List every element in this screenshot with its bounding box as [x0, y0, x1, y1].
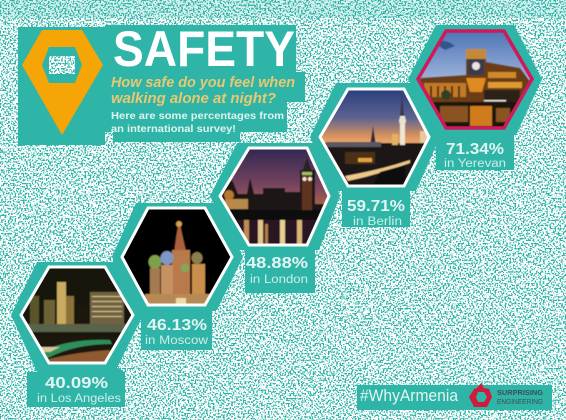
logo wordmark	[497, 388, 543, 406]
value: 71.34% in Yerevan: 71.34%	[446, 141, 504, 158]
value: 59.71% in Berlin	[347, 198, 405, 228]
value: 48.88% in London: in London	[250, 274, 308, 286]
subtitle question: How safe do you feel when	[111, 75, 295, 91]
intro text: Here are some percentages from	[111, 111, 284, 122]
panel: Los Angeles	[11, 262, 143, 407]
intro text	[111, 111, 284, 135]
panel: Berlin	[310, 83, 440, 228]
panel: London	[210, 143, 340, 293]
intro text: an international survey!	[111, 124, 236, 135]
teal backing	[112, 203, 243, 350]
logo wordmark: ENGINEERING	[497, 397, 543, 406]
photo: Yerevan Republic Square at night	[420, 32, 530, 126]
value: 40.09% in Los Angeles	[37, 375, 121, 405]
value: 46.13% in Moscow: in Moscow	[145, 335, 209, 347]
teal backing	[408, 25, 542, 170]
photo: St Basil's Cathedral at night	[124, 210, 230, 304]
footer teal backing	[357, 385, 552, 410]
panel: footer hashtag and logo	[357, 383, 552, 410]
logo wordmark: SURPRISING	[497, 388, 543, 397]
value: 46.13% in Moscow	[145, 317, 209, 347]
subtitle question	[111, 75, 295, 107]
hexagon white border	[122, 208, 232, 305]
hashtag: #WhyArmenia	[360, 387, 459, 405]
value: 71.34% in Yerevan: in Yerevan	[444, 158, 506, 170]
photo: Westminster at dusk	[222, 150, 328, 244]
panel: Moscow	[112, 203, 243, 350]
photo: Berlin skyline at dusk	[322, 90, 428, 184]
value: 46.13% in Moscow: 46.13%	[147, 317, 207, 334]
icon: Surprising Engineering logo	[469, 383, 492, 407]
panel: Yerevan	[408, 25, 542, 170]
value: 59.71% in Berlin: 59.71%	[347, 198, 405, 215]
panel: title header	[18, 21, 305, 145]
value: 48.88% in London	[246, 255, 308, 286]
value: 71.34% in Yerevan	[444, 141, 506, 170]
value: 40.09% in Los Angeles: in Los Angeles	[37, 393, 121, 405]
hexagon crimson border	[418, 31, 532, 128]
hexagon white border	[21, 267, 133, 363]
value: 48.88% in London: 48.88%	[246, 255, 308, 272]
teal backing	[11, 262, 143, 407]
hexagon white border	[220, 148, 329, 245]
icon: orange location pin with hexagon hole	[22, 30, 103, 135]
photo: Los Angeles skyline at night	[22, 268, 132, 362]
hexagon white border	[320, 89, 429, 186]
teal backing	[210, 143, 340, 293]
subtitle question: walking alone at night?	[111, 91, 276, 107]
value: 40.09% in Los Angeles: 40.09%	[45, 375, 108, 392]
title: SAFETY: SAFETY	[113, 21, 295, 77]
header teal backing	[18, 25, 305, 145]
teal backing	[310, 83, 440, 227]
value: 59.71% in Berlin: in Berlin	[353, 216, 402, 228]
